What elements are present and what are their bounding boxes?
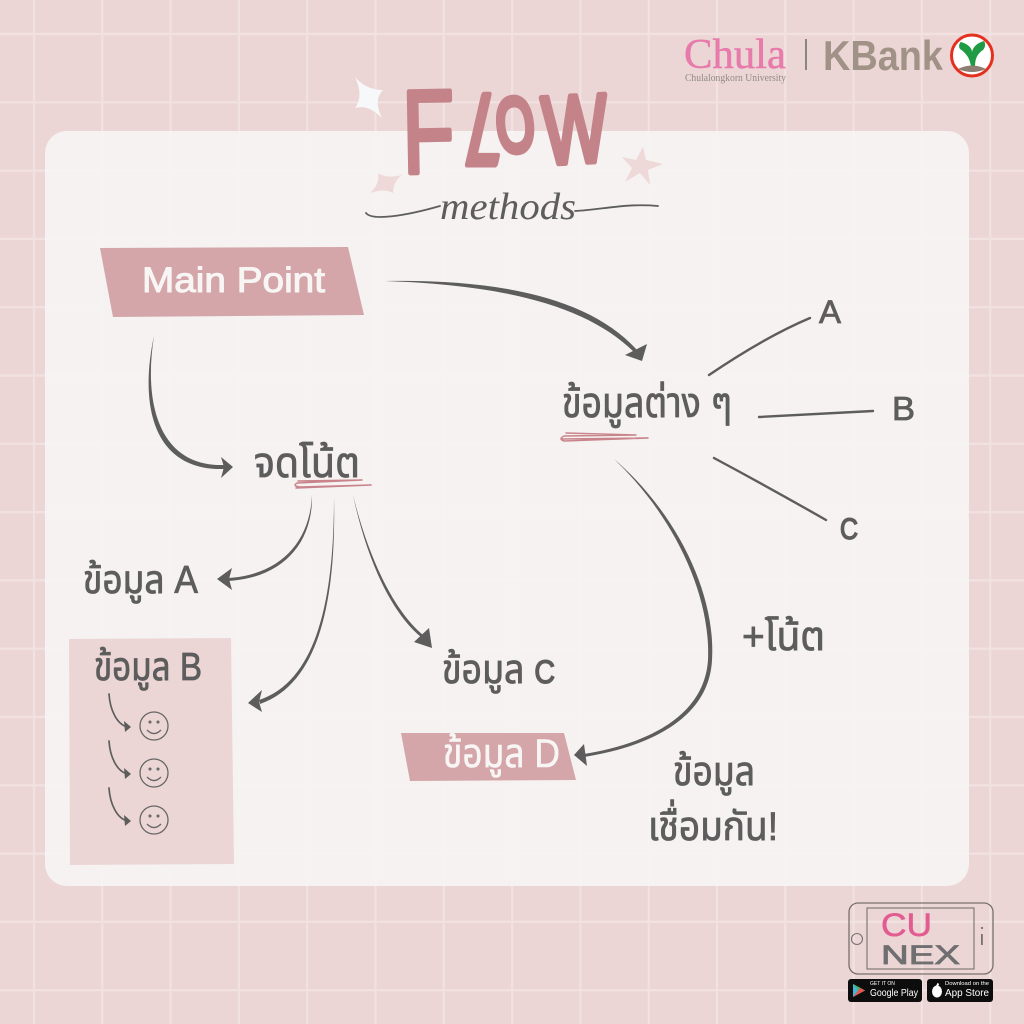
label: C: C bbox=[840, 513, 858, 546]
icon: KBank emblem bbox=[952, 35, 992, 76]
label box: Main Point: Main Point bbox=[142, 261, 325, 300]
badge: App Store: Download on the bbox=[945, 981, 989, 987]
icon: pink sparkle bbox=[370, 173, 402, 193]
title: FLOW: L bbox=[457, 74, 519, 186]
text: connected data: เชื่อมกัน! bbox=[648, 799, 778, 849]
heading: various details bbox=[561, 379, 732, 441]
logo: Chula: Chula bbox=[684, 32, 786, 78]
logo: CUNEX phone: CU bbox=[881, 907, 932, 943]
arrow: notes to data B bbox=[248, 497, 334, 712]
label box: data D: ข้อมูล D bbox=[443, 732, 560, 777]
label box: data D bbox=[401, 732, 576, 781]
arrow: details to data D bbox=[574, 459, 712, 766]
title: FLOW: F bbox=[401, 66, 455, 199]
title: FLOW: O bbox=[492, 81, 539, 170]
icon: pink star bbox=[622, 147, 663, 185]
text: connected data bbox=[648, 750, 778, 849]
heading: various details: ข้อมูลต่าง ๆ bbox=[562, 379, 732, 428]
logo divider bbox=[805, 39, 807, 70]
badge: Google Play: GET IT ON bbox=[870, 981, 895, 987]
panel: data B bbox=[69, 638, 234, 865]
text: data B: ข้อมูล B bbox=[94, 646, 202, 690]
text: plus notes: +โน้ต bbox=[742, 615, 825, 659]
badge: App Store: App Store bbox=[945, 988, 989, 999]
badge: Google Play bbox=[848, 979, 922, 1002]
logo: CUNEX phone bbox=[849, 903, 993, 974]
smiley 2 bbox=[140, 759, 168, 787]
small arrow 3 bbox=[109, 788, 131, 826]
smiley 3 bbox=[140, 806, 168, 834]
badge: Google Play: Google Play bbox=[870, 988, 918, 999]
small arrow 2 bbox=[109, 741, 131, 779]
title: FLOW bbox=[401, 66, 610, 199]
underline scribble bbox=[561, 433, 648, 441]
branch lines: A B C bbox=[709, 318, 873, 520]
subtitle: methods with flourish: methods bbox=[440, 186, 576, 228]
small arrow 1 bbox=[109, 694, 131, 732]
smiley 1 bbox=[140, 712, 168, 740]
logo: CUNEX phone: NEX bbox=[881, 940, 960, 970]
heading: note taking: จดโน้ต bbox=[254, 439, 360, 486]
underline scribble bbox=[295, 480, 371, 488]
text: data C: ข้อมูล C bbox=[442, 648, 555, 693]
subtitle: methods with flourish bbox=[366, 186, 658, 228]
arrow: notes to data A bbox=[217, 495, 312, 590]
panel: main content bbox=[45, 131, 969, 886]
arrow: notes to data C bbox=[353, 495, 432, 648]
icon: white sparkle bbox=[355, 77, 383, 118]
text: connected data: ข้อมูล bbox=[673, 750, 755, 795]
label: A: A bbox=[819, 294, 842, 330]
logo: KBank: KBank bbox=[823, 32, 944, 79]
title: FLOW: W bbox=[539, 75, 610, 185]
text: data A: ข้อมูล A bbox=[83, 559, 198, 603]
arrow: Main Point to details bbox=[385, 281, 647, 361]
arrow: Main Point to notes bbox=[149, 336, 233, 478]
badge: App Store bbox=[927, 979, 993, 1002]
logo: Chula: Chulalongkorn University bbox=[685, 73, 786, 84]
label: B: B bbox=[892, 390, 915, 427]
label box: Main Point bbox=[100, 247, 364, 317]
